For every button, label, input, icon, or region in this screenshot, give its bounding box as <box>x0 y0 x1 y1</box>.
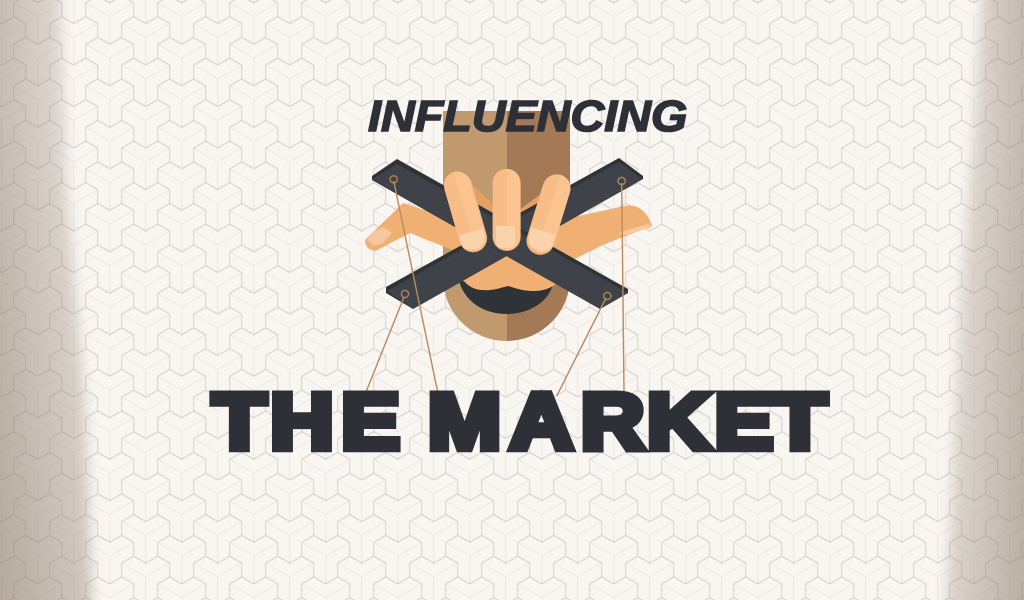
title: THE MARKET: THE MARKET <box>212 378 827 465</box>
title: INFLUENCING: INFLUENCING <box>368 91 687 141</box>
puppet strings <box>366 181 624 396</box>
bar ring: bottom right <box>604 292 611 300</box>
bar ring: bottom left <box>401 290 409 298</box>
mouth <box>459 281 553 314</box>
index finger reaching right <box>550 205 652 268</box>
left finger <box>441 168 490 256</box>
middle finger <box>493 169 521 251</box>
puppeteer illustration <box>365 111 652 396</box>
left wall shadow <box>0 0 93 600</box>
control bar: top-right to bottom-left <box>386 158 643 309</box>
head <box>443 111 570 341</box>
right wall shadow <box>945 0 1024 600</box>
palm and moustache <box>463 252 556 291</box>
hand shadow on head <box>470 182 570 250</box>
thumb <box>365 203 470 258</box>
bar ring: top right <box>618 177 625 185</box>
bar ring: top left <box>390 176 397 183</box>
control bar: top-left to bottom-right <box>372 159 628 309</box>
right finger <box>523 171 574 258</box>
